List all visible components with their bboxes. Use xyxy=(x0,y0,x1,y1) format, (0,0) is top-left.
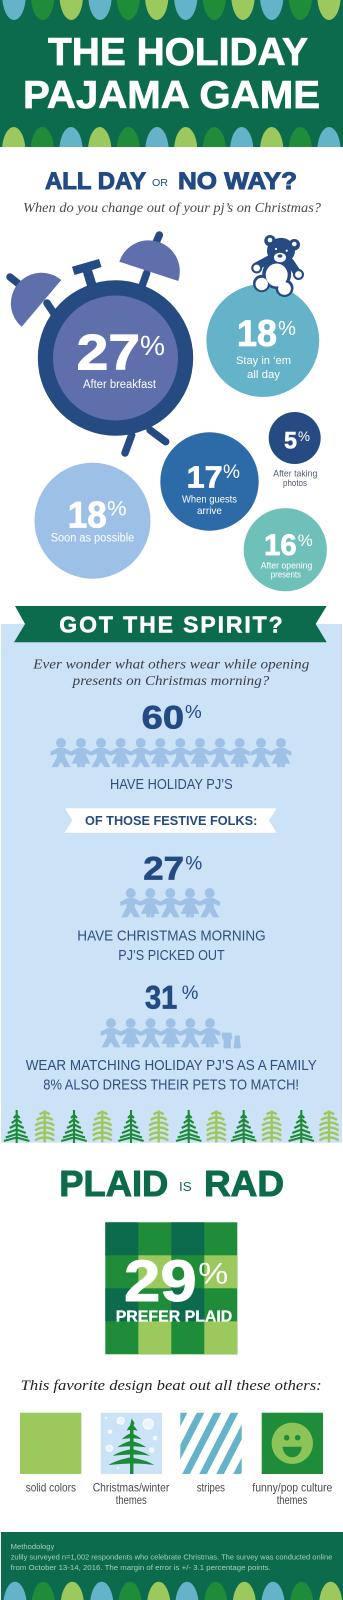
stat text: % xyxy=(198,1257,228,1290)
stat: 60%: 60 xyxy=(142,699,184,735)
question text xyxy=(32,657,309,689)
heading: all day or no way: ALL DAY xyxy=(45,168,146,195)
circle: 18% stay in 'em all day: % xyxy=(278,318,296,340)
circle: 5% after taking photos xyxy=(269,412,321,488)
circle: 18% stay in 'em all day: Stay in ‘em xyxy=(236,355,291,367)
heading: all day or no way: OR xyxy=(152,178,168,189)
methodology text: from October 13-14, 2016. The margin of error is +/- 3.1 percentage points. xyxy=(11,1563,271,1572)
question text: presents on Christmas morning? xyxy=(72,674,269,689)
stat: 60% xyxy=(142,699,202,735)
icon: teddy bear xyxy=(251,235,304,297)
icon: cat xyxy=(234,1036,240,1048)
subheading: favorite design: This favorite design beat out all these others: xyxy=(21,1378,322,1394)
stat text: 27 xyxy=(77,324,140,380)
white ribbon subheading xyxy=(64,808,277,833)
stat: 31%: % xyxy=(182,983,198,1004)
ribbon heading: GOT THE SPIRIT? xyxy=(59,612,283,638)
stat: 27%: % xyxy=(185,853,202,874)
circle: 5% after taking photos: photos xyxy=(283,478,307,488)
tile: christmas winter themes: themes xyxy=(116,1493,147,1507)
bear silhouette xyxy=(251,235,304,297)
clock bells and hardware xyxy=(10,235,180,453)
ribbon heading xyxy=(14,606,327,642)
alarm clock: 27% after breakfast xyxy=(10,235,193,453)
stat text: 29 xyxy=(124,1249,197,1314)
title: PAJAMA GAME xyxy=(23,74,320,117)
panel: header banner xyxy=(0,0,343,147)
label: christmas morning pjs xyxy=(77,928,266,964)
tile: solid colors: solid colors xyxy=(26,1481,76,1495)
stat text xyxy=(77,324,165,391)
stat text: PREFER PLAID xyxy=(116,1309,232,1326)
tile: solid colors xyxy=(20,1413,81,1495)
methodology text: zulily surveyed n=1,002 respondents who celebrate Christmas. The survey was conducted online xyxy=(11,1552,332,1561)
circle: 16% after opening presents: After opening xyxy=(261,560,312,571)
white ribbon subheading: OF THOSE FESTIVE FOLKS: xyxy=(85,814,257,828)
stat text: After breakfast xyxy=(83,379,157,391)
label: matching family pjs: WEAR MATCHING HOLIDAY PJ’S AS A FAMILY xyxy=(26,1057,317,1074)
tile: christmas winter themes xyxy=(93,1413,169,1507)
tree xyxy=(108,1418,154,1474)
circle: 18% stay in 'em all day: all day xyxy=(247,369,281,381)
title xyxy=(23,31,320,117)
stat: 60%: % xyxy=(185,702,202,722)
stat: 31%: 31 xyxy=(145,979,177,1015)
label: have holiday pjs: HAVE HOLIDAY PJ’S xyxy=(110,776,233,793)
people row: 5 figures xyxy=(121,888,220,917)
heading: plaid is rad: RAD xyxy=(204,1163,284,1204)
circle: 17% when guests arrive: When guests xyxy=(182,494,237,506)
circle: 16% after opening presents: presents xyxy=(271,570,301,581)
clock face xyxy=(38,280,193,436)
panel: methodology footer xyxy=(1,1532,343,1600)
people row: 12 figures xyxy=(51,738,291,767)
heading: plaid is rad xyxy=(59,1163,284,1204)
heading: all day or no way xyxy=(45,168,297,195)
tile: christmas winter themes: Christmas/winter xyxy=(93,1481,169,1495)
circle: 5% after taking photos: % xyxy=(298,428,310,444)
subheading question: When do you change out of your pj’s on Christmas? xyxy=(23,200,321,215)
plaid pattern xyxy=(105,1222,237,1354)
circle: 17% when guests arrive: % xyxy=(223,462,240,483)
circle: 16% after opening presents: % xyxy=(298,531,313,550)
circle: 17% when guests arrive: arrive xyxy=(197,505,222,517)
panel: got the spirit xyxy=(1,606,342,1143)
bottom ornament row xyxy=(2,127,340,147)
circle: 18% soon as possible: 18 xyxy=(68,494,107,535)
heading: all day or no way: NO WAY? xyxy=(178,168,297,195)
circle: 16% after opening presents: 16 xyxy=(264,529,297,562)
heading: plaid is rad: IS xyxy=(179,1179,192,1194)
label: matching family pjs xyxy=(26,1057,317,1093)
circle: 18% soon as possible: Soon as possible xyxy=(51,533,134,545)
tile: funny pop culture themes: themes xyxy=(277,1493,307,1507)
snowflakes xyxy=(105,1417,157,1469)
label: christmas morning pjs: PJ’S PICKED OUT xyxy=(118,947,225,964)
circle: 18% soon as possible xyxy=(34,463,150,579)
icon: smiley xyxy=(272,1423,313,1464)
label: christmas morning pjs: HAVE CHRISTMAS MORNING xyxy=(77,928,266,945)
bear highlights xyxy=(253,238,302,295)
circle: 5% after taking photos: After taking xyxy=(273,469,317,479)
people row: 6 figures with pets xyxy=(101,1018,240,1048)
icon: dog xyxy=(222,1033,232,1048)
label: matching family pjs: 8% ALSO DRESS THEIR PETS TO MATCH! xyxy=(43,1076,299,1093)
methodology text xyxy=(11,1542,332,1572)
circle: 18% soon as possible: % xyxy=(107,498,127,521)
tile: stripes: stripes xyxy=(197,1481,225,1495)
tree border xyxy=(4,1110,339,1143)
title: THE HOLIDAY xyxy=(48,31,308,74)
circle: 18% stay in 'em all day: 18 xyxy=(237,313,277,354)
circle: 18% stay in 'em all day xyxy=(206,284,319,397)
tile: funny pop culture themes xyxy=(252,1413,333,1507)
stat: 27% xyxy=(143,850,202,886)
circle: 16% after opening presents xyxy=(244,508,327,591)
circle: 17% when guests arrive xyxy=(160,432,259,531)
footer ornament row xyxy=(3,1582,342,1600)
circle: 17% when guests arrive: 17 xyxy=(187,460,223,495)
tile: stripes xyxy=(180,1412,242,1494)
plaid square: 29% prefer plaid xyxy=(105,1222,237,1354)
top ornament row xyxy=(2,0,341,20)
question text: Ever wonder what others wear while opening xyxy=(32,657,309,672)
heading: plaid is rad: PLAID xyxy=(59,1163,168,1204)
tile: funny pop culture themes: funny/pop culture xyxy=(252,1481,333,1495)
stat: 31% xyxy=(145,979,198,1015)
methodology text: Methodology xyxy=(11,1542,55,1551)
stat text: % xyxy=(140,330,165,361)
stat: 27%: 27 xyxy=(143,850,184,886)
circle: 5% after taking photos: 5 xyxy=(284,427,297,454)
stat text xyxy=(116,1249,232,1326)
